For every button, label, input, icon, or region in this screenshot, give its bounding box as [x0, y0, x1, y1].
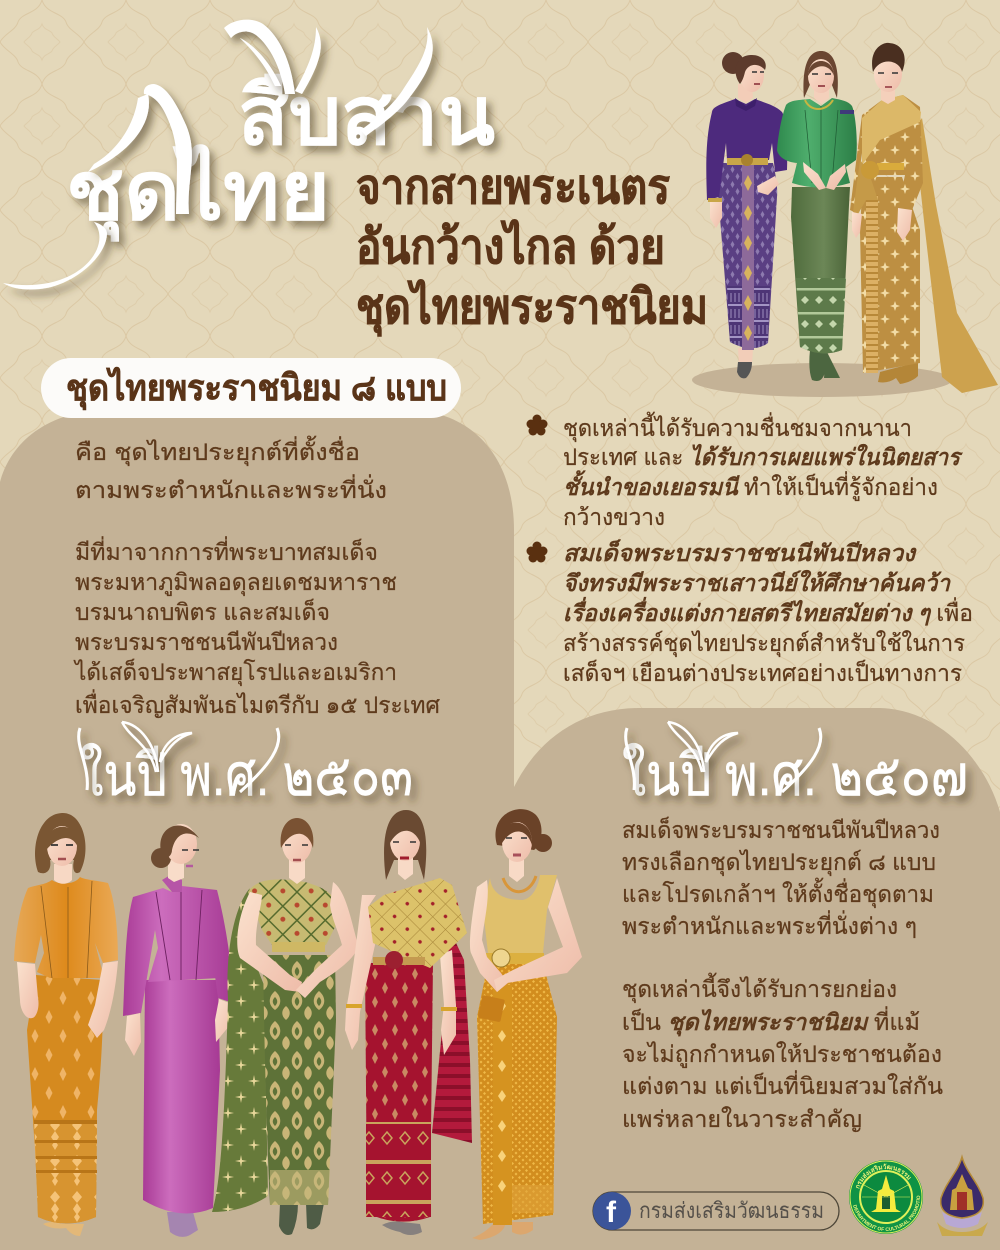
text block: definition: [75, 436, 387, 503]
text block: origin story: บรมนาถบพิตร และสมเด็จ: [75, 597, 330, 625]
subtitle line two: อันกว้างไกล ด้วย: [356, 218, 665, 274]
text block: first bullet: กว้างขวาง: [563, 504, 665, 530]
text block: second bullet: จึงทรงมีพระราชเสาวนีย์ให้ศึกษาค้นคว้า: [563, 569, 951, 596]
icon: flower bullet one: [526, 414, 548, 436]
text block: first bullet: [563, 412, 964, 530]
text block: royal dress popularity: แพร่หลายในวาระสำคัญ: [622, 1106, 862, 1132]
subtitle line three: ชุดไทยพระราชนิยม: [356, 278, 708, 337]
figure: purple dress: [706, 52, 787, 378]
figure: green dress: [777, 51, 857, 381]
text block: origin story: พระมหาภูมิพลอดุลยเดชมหาราช: [75, 569, 397, 596]
bottom figures: five women in Thai dress: [14, 809, 582, 1240]
figure: magenta dress: [123, 824, 233, 1237]
text block: definition: ตามพระตำหนักและพระที่นั่ง: [75, 474, 387, 503]
text block: royal dress popularity: [622, 973, 943, 1132]
title swashes: [3, 20, 433, 289]
title line one: สืบสาน: [238, 71, 495, 162]
panel: right year 2507 panel: [514, 708, 1000, 1250]
text block: royal dress popularity: เป็น ชุดไทยพระราชนิยม ที่แม้: [622, 1006, 920, 1037]
panel: left definition panel: [0, 410, 514, 1250]
text block: origin story: มีที่มาจากการที่พระบาทสมเด็จ: [75, 536, 378, 565]
subtitle heading: [356, 161, 708, 337]
icon: facebook circle: [593, 1192, 631, 1230]
icon: flower bullet two: [526, 542, 548, 562]
facebook pill: [593, 1192, 839, 1230]
logo: ministry crest: [937, 1157, 988, 1236]
text block: origin story: [73, 536, 440, 718]
figure: gold dress with sash: [850, 43, 998, 393]
logo: department seal: DEPARTMENT OF CULTURAL PROMOTION: [853, 1196, 920, 1231]
text block: royal dress popularity: ชุดเหล่านี้จึงได้รับการยกย่อง: [622, 973, 897, 1003]
text block: 2507 selection: พระตำหนักและพระที่นั่งต่าง ๆ: [622, 910, 917, 939]
text block: first bullet: ประเทศ และ ได้รับการเผยแพร่ในนิตยสาร: [563, 443, 964, 470]
subtitle line one: จากสายพระเนตร: [356, 161, 670, 214]
year heading 2503: ในปี พ.ศ. ๒๕๐๓: [80, 742, 413, 808]
text block: first bullet: ชั้นนำของเยอรมนี ทำให้เป็นที่รู้จักอย่าง: [563, 470, 938, 501]
pill heading: eight royal dress styles: [41, 358, 461, 418]
figure: green dress with cape: [212, 818, 358, 1235]
figure: red dress with gold shawl: [345, 810, 472, 1235]
text block: second bullet: สร้างสรรค์ชุดไทยประยุกต์สำหรับใช้ในการ: [563, 630, 965, 657]
title line two: ชุดไทย: [66, 144, 330, 242]
page name: กรมส่งเสริมวัฒนธรรม: [639, 1198, 824, 1223]
figure: orange dress: [14, 813, 118, 1236]
text block: origin story: เพื่อเจริญสัมพันธไมตรีกับ ๑๕ ประเทศ: [75, 689, 440, 718]
text block: origin story: ได้เสด็จประพาสยุโรปและอเมริกา: [73, 657, 397, 686]
text block: royal dress popularity: จะไม่ถูกกำหนดให้ประชาชนต้อง: [622, 1041, 942, 1068]
text block: first bullet: ชุดเหล่านี้ได้รับความชื่นชมจากนานา: [563, 412, 912, 442]
text block: second bullet: [563, 539, 973, 686]
text block: 2507 selection: สมเด็จพระบรมราชชนนีพันปีหลวง: [622, 815, 940, 843]
pill outline: [593, 1192, 839, 1230]
year swashes 2503: [79, 722, 279, 792]
pill text: ชุดไทยพระราชนิยม ๘ แบบ: [66, 366, 447, 411]
figure: gold and orange dress: [470, 809, 582, 1240]
text block: 2507 selection: ทรงเลือกชุดไทยประยุกต์ ๘ แบบ: [622, 849, 936, 876]
pill shape: [41, 358, 461, 418]
text block: definition: คือ ชุดไทยประยุกต์ที่ตั้งชื่อ: [75, 436, 360, 466]
text block: second bullet: เสด็จฯ เยือนต่างประเทศอย่างเป็นทางการ: [563, 658, 962, 686]
text block: second bullet: สมเด็จพระบรมราชชนนีพันปีหลวง: [563, 539, 917, 566]
year heading 2503: [79, 722, 413, 808]
logo: department seal: กรมส่งเสริมวัฒนธรรม: [856, 1164, 911, 1189]
icon: facebook f: f: [606, 1196, 617, 1229]
text block: royal dress popularity: แต่งตาม แต่เป็นที่นิยมสวมใส่กัน: [622, 1070, 943, 1099]
title: white calligraphic heading: [3, 20, 495, 289]
text block: 2507 selection: และโปรดเกล้าฯ ให้ตั้งชื่อชุดตาม: [622, 878, 934, 908]
top figures: three women in Thai dress: [692, 43, 998, 397]
ground shadow: [692, 363, 952, 397]
text block: origin story: พระบรมราชชนนีพันปีหลวง: [75, 629, 338, 655]
text block: 2507 selection: [622, 815, 940, 939]
year swashes 2507: [626, 722, 821, 792]
text block: second bullet: เรื่องเครื่องแต่งกายสตรีไทยสมัยต่าง ๆ เพื่อ: [563, 596, 973, 626]
